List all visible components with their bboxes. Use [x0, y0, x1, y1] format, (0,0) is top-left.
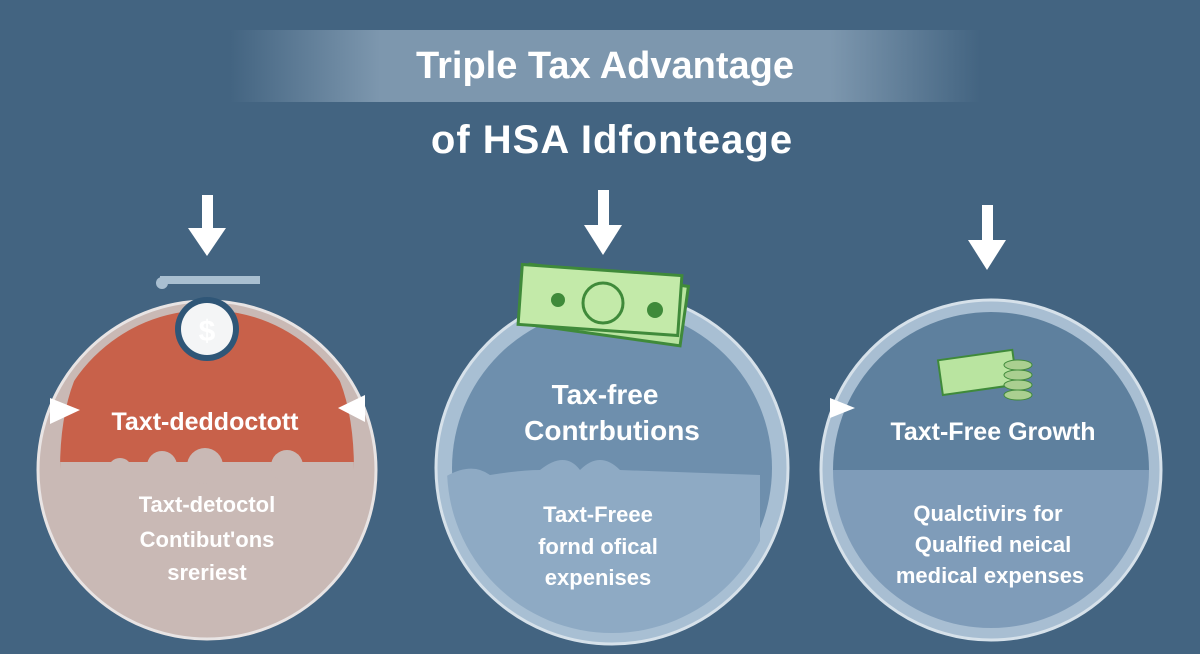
panel: tax-free contributions: Contrbutions — [524, 415, 700, 446]
panel: tax-free contributions — [436, 264, 788, 644]
panel: tax-deductible: Taxt-detoctol — [139, 492, 275, 517]
subtitle: of HSA Idfonteage — [431, 118, 793, 162]
arrow 3 — [968, 205, 1006, 270]
panel: tax-free contributions: fornd ofical — [538, 534, 658, 559]
panel: tax-deductible — [38, 276, 376, 639]
panel: tax-free contributions: expenises — [545, 565, 651, 590]
panel: tax-deductible: Taxt-deddoctott — [111, 408, 299, 436]
icon: coin: $ — [199, 315, 216, 348]
icon: money stack — [938, 350, 1032, 400]
panel: tax-free growth: Taxt-Free Growth — [890, 418, 1096, 446]
panel: tax-deductible: Contibut'ons — [140, 527, 274, 552]
panel: tax-free growth: Qualfied neical — [915, 532, 1071, 557]
panel: tax-free growth: medical expenses — [896, 563, 1084, 588]
panel: tax-free contributions: Taxt-Freee — [543, 502, 653, 527]
side arrow — [830, 398, 855, 418]
panel: tax-free contributions: Tax-free — [552, 379, 658, 410]
arrow 2 — [584, 190, 622, 255]
title banner: Triple Tax Advantage — [416, 45, 794, 87]
panel: tax-deductible: sreriest — [167, 560, 247, 585]
panel: tax-free growth: Qualctivirs for — [913, 501, 1063, 526]
title banner — [230, 30, 980, 102]
side arrows — [50, 395, 365, 424]
icon: coin — [156, 276, 260, 361]
icon: bills — [518, 264, 688, 346]
arrow 1 — [188, 195, 226, 256]
panel: tax-free growth — [820, 300, 1161, 650]
